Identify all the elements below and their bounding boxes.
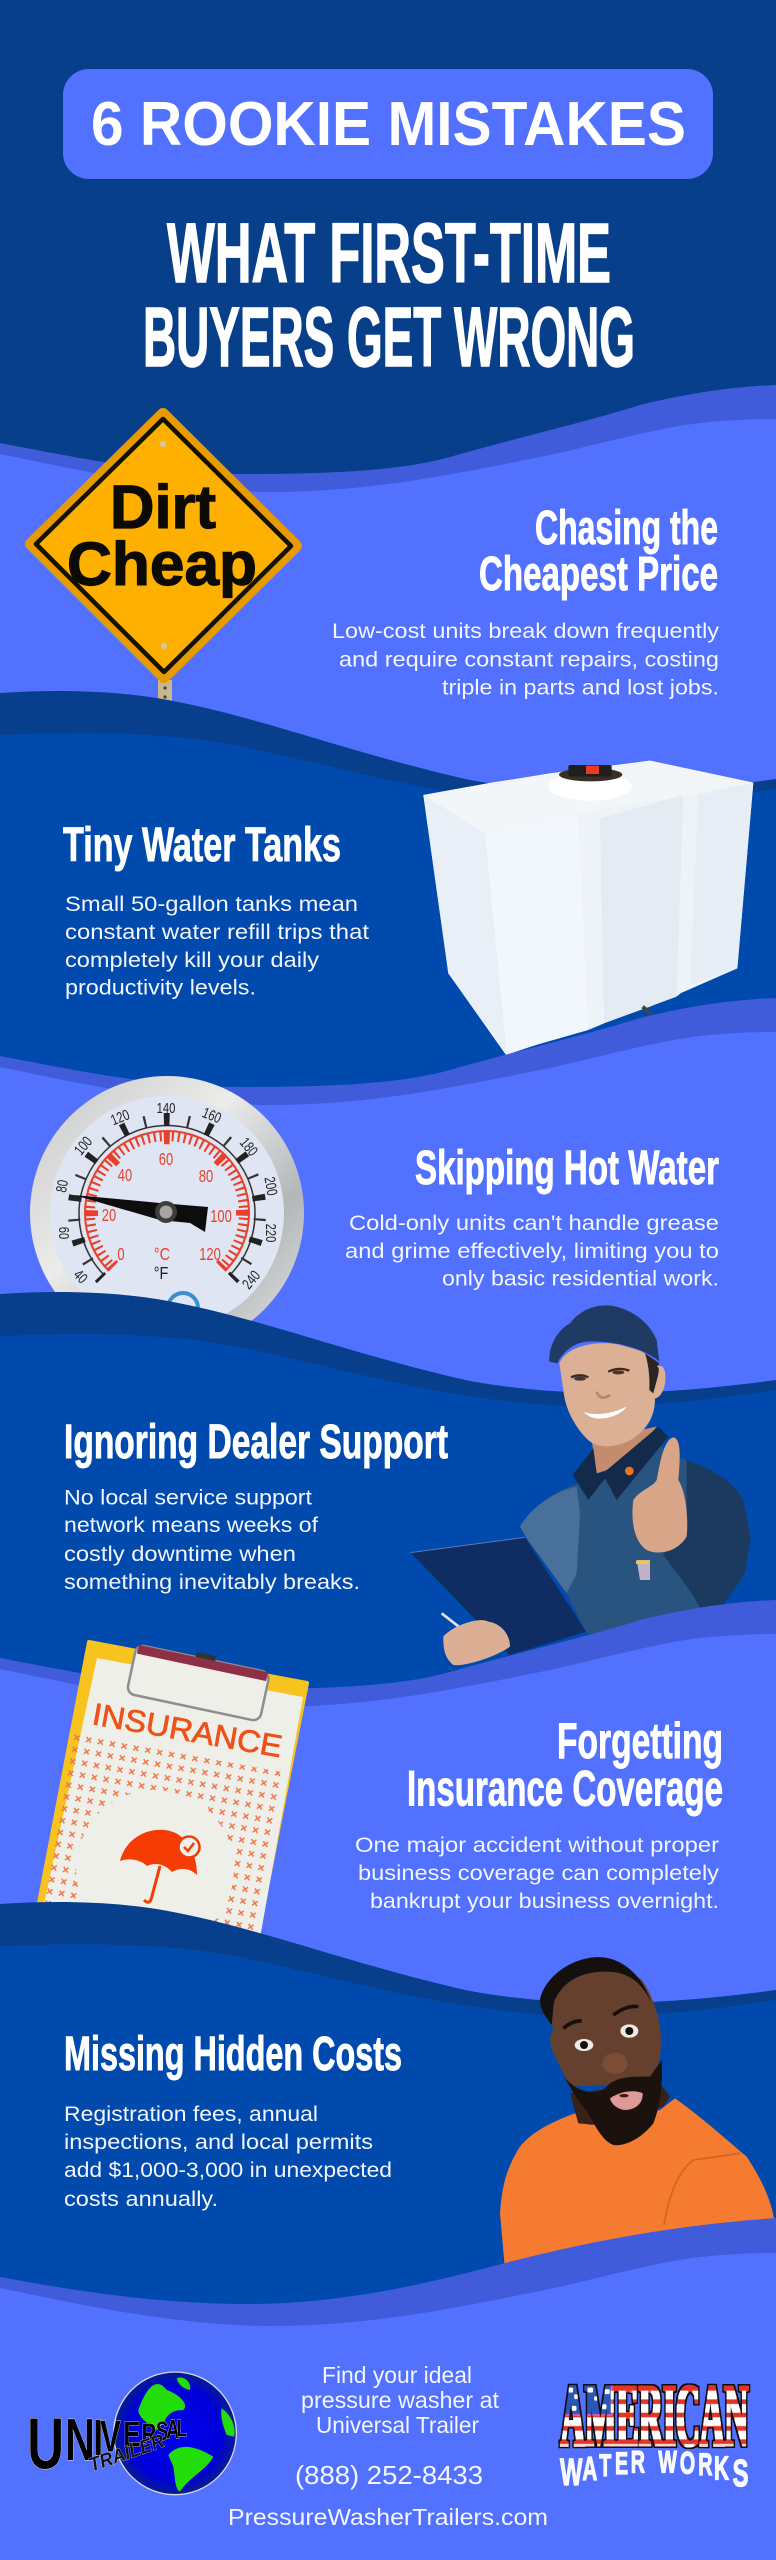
text: skipping hot water: Cold-only units can't handle grease: [349, 1212, 719, 1235]
text: call to action: Universal Trailer: [316, 2412, 479, 2438]
icon: temperature gauge: 160: [200, 1104, 224, 1127]
text: forgetting insurance coverage: business coverage can completely: [358, 1862, 720, 1885]
logo: american water works: S: [733, 2451, 748, 2494]
text: missing hidden costs: [64, 2103, 392, 2211]
icon: temperature gauge: 140: [157, 1099, 175, 1116]
logo: american water works: O: [680, 2444, 695, 2481]
text: call to action: Find your ideal: [322, 2362, 472, 2388]
logo: universal trailer: E: [123, 2414, 140, 2455]
icon: temperature gauge: 120: [199, 1245, 221, 1265]
icon: temperature gauge: 220: [263, 1224, 280, 1242]
text: skipping hot water: only basic residential work.: [442, 1268, 719, 1290]
panel: footer: [0, 2218, 776, 2560]
logo: universal trailer: L: [177, 2415, 187, 2442]
icon: temperature gauge: 40: [70, 1266, 91, 1287]
icon: insurance clipboard: [39, 1640, 307, 1948]
logo: universal trailer: V: [100, 2412, 121, 2462]
icon: temperature gauge: 80: [53, 1178, 71, 1194]
logo: american water works: A: [582, 2450, 597, 2487]
text: ignoring dealer support: No local service support: [64, 1486, 312, 1510]
logo: universal trailer: N: [65, 2407, 95, 2473]
logo: universal trailer: R: [142, 2418, 156, 2450]
panel: ignoring dealer support: [0, 1292, 776, 1724]
text: ignoring dealer support: something inevitably breaks.: [64, 1571, 360, 1594]
icon: temperature gauge: 200: [261, 1175, 281, 1197]
text: tiny water tanks: Small 50-gallon tanks mean: [65, 893, 358, 916]
heading: chasing the cheapest price: [479, 502, 718, 601]
text: call to action: pressure washer at: [301, 2387, 500, 2413]
icon: temperature gauge: 100: [71, 1133, 96, 1158]
panel: forgetting insurance coverage: [0, 1600, 776, 2028]
logo: universal trailer: A: [166, 2414, 180, 2444]
logo: american water works: W: [658, 2443, 677, 2480]
icon: temperature gauge: 40: [118, 1166, 132, 1186]
text: skipping hot water: and grime effectively, limiting you to: [345, 1240, 719, 1263]
text: call to action: PressureWasherTrailers.com: [228, 2504, 548, 2530]
text: chasing the cheapest price: Low-cost units break down frequently: [332, 620, 720, 643]
text: missing hidden costs: costs annually.: [64, 2188, 218, 2211]
text: ignoring dealer support: network means weeks of: [64, 1514, 318, 1537]
text: chasing the cheapest price: [332, 620, 720, 700]
panel: missing hidden costs: [0, 1902, 776, 2334]
icon: temperature gauge: °C: [154, 1245, 170, 1264]
panel: tiny water tanks: [0, 691, 776, 1123]
text: missing hidden costs: Registration fees, annual: [64, 2103, 318, 2126]
text: call to action: (888) 252-8433: [295, 2460, 483, 2490]
logo: american water works: E: [615, 2445, 628, 2481]
logo: universal trailer: S: [156, 2416, 169, 2446]
icon: dirt cheap road sign: Cheap: [67, 530, 257, 598]
text: forgetting insurance coverage: [355, 1834, 720, 1913]
title banner: 6 ROOKIE MISTAKES: [91, 90, 686, 159]
icon: temperature gauge: 240: [239, 1267, 264, 1292]
heading: ignoring dealer support: Ignoring Dealer Support: [64, 1416, 448, 1469]
text: call to action: [228, 2362, 548, 2530]
logo: universal trailer: [27, 2372, 236, 2495]
heading: missing hidden costs: Missing Hidden Costs: [64, 2028, 402, 2081]
logo: american water works: [560, 2366, 748, 2494]
title: [143, 206, 635, 384]
icon: temperature gauge: 20: [102, 1206, 116, 1226]
icon: temperature gauge: °F: [154, 1264, 168, 1283]
text: tiny water tanks: [65, 893, 369, 1000]
logo: american water works: R: [631, 2443, 645, 2480]
logo: universal trailer: TRAILER: [86, 2431, 167, 2476]
text: skipping hot water: [345, 1212, 719, 1290]
text: tiny water tanks: productivity levels.: [65, 976, 256, 1000]
logo: universal trailer: U: [27, 2403, 64, 2485]
icon: insurance clipboard: INSURANCE: [90, 1696, 285, 1764]
heading: tiny water tanks: Tiny Water Tanks: [63, 819, 341, 872]
icon: surprised man in orange shirt: [500, 1957, 774, 2270]
text: chasing the cheapest price: and require constant repairs, costing: [339, 648, 719, 672]
text: tiny water tanks: completely kill your daily: [65, 949, 320, 972]
logo: american water works: R: [698, 2446, 712, 2482]
panel: skipping hot water: [0, 998, 776, 1426]
text: chasing the cheapest price: triple in parts and lost jobs.: [442, 676, 719, 700]
text: ignoring dealer support: [64, 1486, 360, 1594]
logo: universal trailer: I: [93, 2410, 103, 2467]
icon: smiling technician with clipboard: [411, 1305, 751, 1665]
icon: white water tank: [423, 761, 753, 1055]
text: forgetting insurance coverage: bankrupt your business overnight.: [370, 1890, 719, 1913]
icon: temperature gauge: 60: [56, 1227, 73, 1239]
title banner: [63, 69, 713, 179]
text: ignoring dealer support: costly downtime when: [64, 1543, 296, 1566]
logo: american water works: K: [714, 2449, 729, 2487]
icon: temperature gauge: 60: [159, 1150, 173, 1170]
text: missing hidden costs: inspections, and local permits: [64, 2131, 373, 2154]
icon: dirt cheap road sign: [31, 414, 296, 704]
text: tiny water tanks: constant water refill trips that: [65, 921, 369, 944]
logo: american water works: W: [560, 2450, 583, 2493]
icon: temperature gauge: 180: [236, 1134, 261, 1159]
panel: chasing the cheapest price: [0, 385, 776, 813]
icon: temperature gauge: 100: [210, 1207, 232, 1227]
text: missing hidden costs: add $1,000-3,000 in unexpected: [64, 2159, 392, 2182]
heading: forgetting insurance coverage: [407, 1713, 723, 1816]
icon: temperature gauge: 80: [199, 1167, 213, 1187]
icon: temperature gauge: 120: [108, 1106, 132, 1129]
icon: temperature gauge: 0: [117, 1245, 125, 1265]
text: forgetting insurance coverage: One major accident without proper: [355, 1834, 719, 1857]
icon: temperature gauge: [30, 1076, 304, 1350]
icon: dirt cheap road sign: Dirt: [110, 473, 216, 541]
logo: american water works: T: [599, 2447, 611, 2483]
